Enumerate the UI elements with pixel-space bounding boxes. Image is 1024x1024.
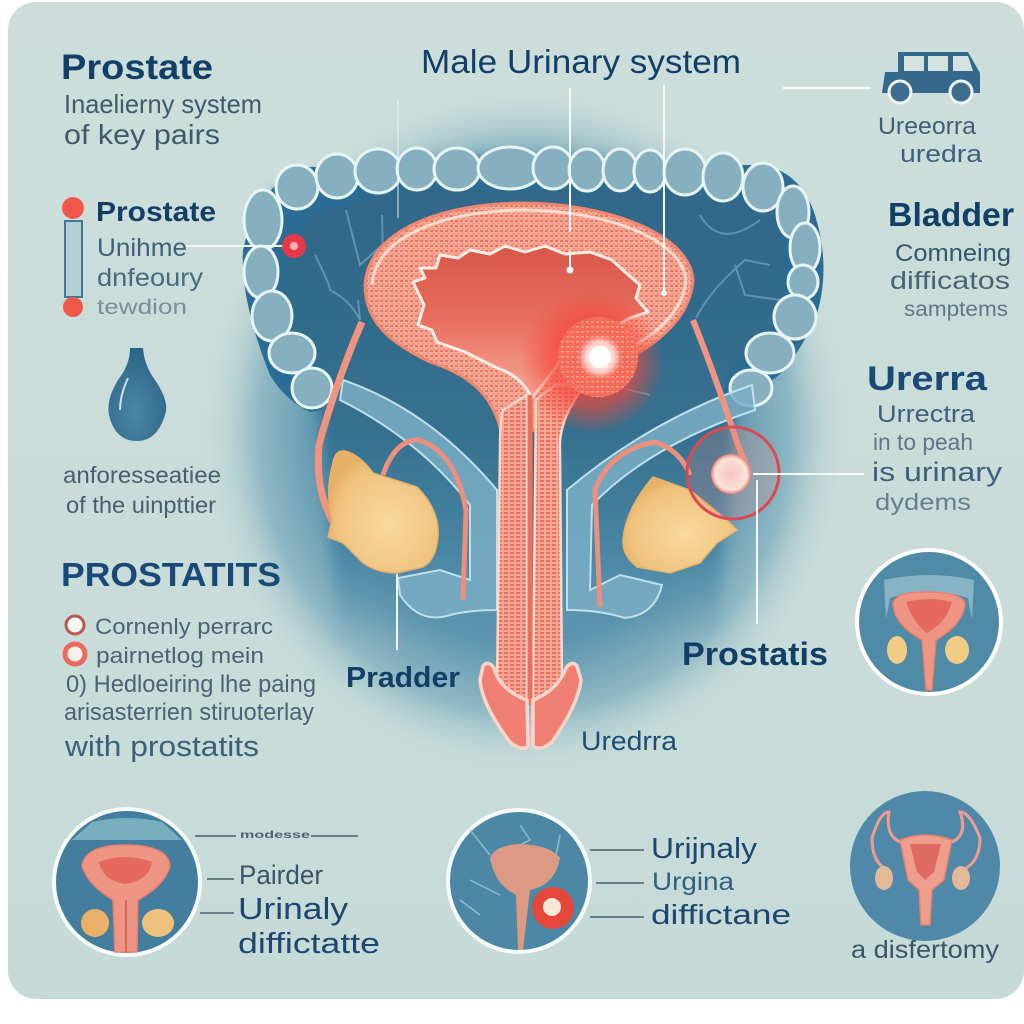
title: Male Urinary system: [421, 43, 741, 80]
urethra block: [867, 360, 1003, 515]
top left heading: Prostate: [61, 48, 213, 87]
bottom centre labels: diffictane: [651, 899, 791, 930]
inset: bottom right: [850, 791, 1000, 941]
thermometer bar: [65, 221, 82, 297]
prostatitis block: pairnetlog mein: [96, 643, 264, 668]
left gland: [328, 451, 438, 573]
urethra block: in to peah: [873, 429, 973, 455]
label: prostatis: Prostatis: [682, 636, 828, 672]
prostate legend: dnfeoury: [97, 264, 204, 292]
urethra block: dydems: [875, 489, 971, 515]
right gland: [623, 477, 737, 573]
leader dots: [566, 266, 667, 296]
faint veins: [315, 210, 780, 395]
highlighted nodule: [687, 427, 779, 519]
bladder rim highlight: [372, 210, 686, 365]
bladder block: Bladder: [888, 196, 1014, 233]
inset: bottom left: [54, 809, 200, 955]
urethra block: Urrectra: [877, 401, 976, 428]
van caption: uredra: [900, 141, 983, 168]
van caption: Ureeorra: [878, 113, 977, 140]
prostatitis block: arisasterrien stiruoterlay: [64, 699, 314, 726]
icon: water drop: [108, 348, 166, 441]
bladder block: Comneing: [895, 240, 1011, 267]
bladder block: samptems: [904, 298, 1008, 321]
top left heading: Inaelierny system: [64, 89, 262, 119]
label: pradder: Pradder: [346, 662, 460, 694]
left cord: [318, 322, 362, 522]
prostate legend: tewdion: [97, 296, 187, 319]
bladder block: [888, 196, 1014, 321]
inset: bottom centre: [448, 810, 590, 952]
hot spot: [582, 339, 618, 375]
left inner duct: [383, 440, 466, 600]
vessel bands: [340, 380, 755, 618]
leader lines: [183, 85, 864, 650]
prostate legend: Prostate: [96, 196, 216, 227]
inflamed prostate: [558, 317, 638, 397]
bladder lumen: [413, 246, 648, 398]
bottom centre labels: [590, 833, 791, 930]
main anatomy illustration: [243, 147, 823, 748]
drop caption: [63, 462, 221, 518]
prostate legend: [62, 196, 216, 319]
bottom centre labels: Urgina: [652, 868, 734, 896]
caption: bottom right: a disfertomy: [851, 936, 1000, 964]
icon: van: [783, 52, 980, 103]
pelvic cavity: [260, 160, 806, 640]
urethra right tube: [533, 385, 585, 700]
urethra block: is urinary: [872, 457, 1003, 487]
prostate legend: Unihme: [97, 234, 187, 262]
urethra left tube: [497, 395, 527, 700]
drop caption: anforesseatiee: [63, 462, 221, 488]
small red marker: [282, 234, 306, 258]
intestine band: [243, 147, 823, 412]
prostatitis block: 0) Hedloeiring lhe paing: [66, 671, 316, 698]
prostatitis block: [61, 556, 316, 763]
top left heading: [61, 48, 262, 150]
prostatitis block: Cornenly perrarc: [95, 614, 273, 639]
urethra tip left: [480, 663, 528, 748]
inflammation glow: [520, 290, 664, 434]
urethra centre channel: [528, 395, 532, 705]
bladder block: difficatos: [890, 267, 1010, 295]
van caption: [878, 113, 983, 168]
bottom left labels: [195, 830, 380, 960]
central glow: [200, 85, 850, 775]
bottom centre labels: Urijnaly: [651, 833, 758, 865]
right cord: [693, 320, 748, 470]
bladder wall: [365, 203, 693, 440]
label: uredrra: Uredrra: [581, 726, 678, 756]
prostatitis block: with prostatits: [64, 731, 259, 763]
prostatitis block: PROSTATITS: [61, 556, 281, 593]
urethra block: Urerra: [867, 360, 988, 398]
urethra tip right: [533, 663, 581, 748]
top left heading: of key pairs: [64, 119, 220, 150]
inset: right circle: [857, 550, 1001, 694]
bottom left labels: diffictatte: [238, 928, 380, 960]
drop caption: of the uinpttier: [66, 492, 216, 518]
right inner duct: [595, 442, 690, 607]
bottom left labels: Pairder: [239, 860, 323, 890]
bottom left labels: modesse: [240, 830, 311, 841]
bottom left labels: Urinaly: [238, 891, 349, 926]
